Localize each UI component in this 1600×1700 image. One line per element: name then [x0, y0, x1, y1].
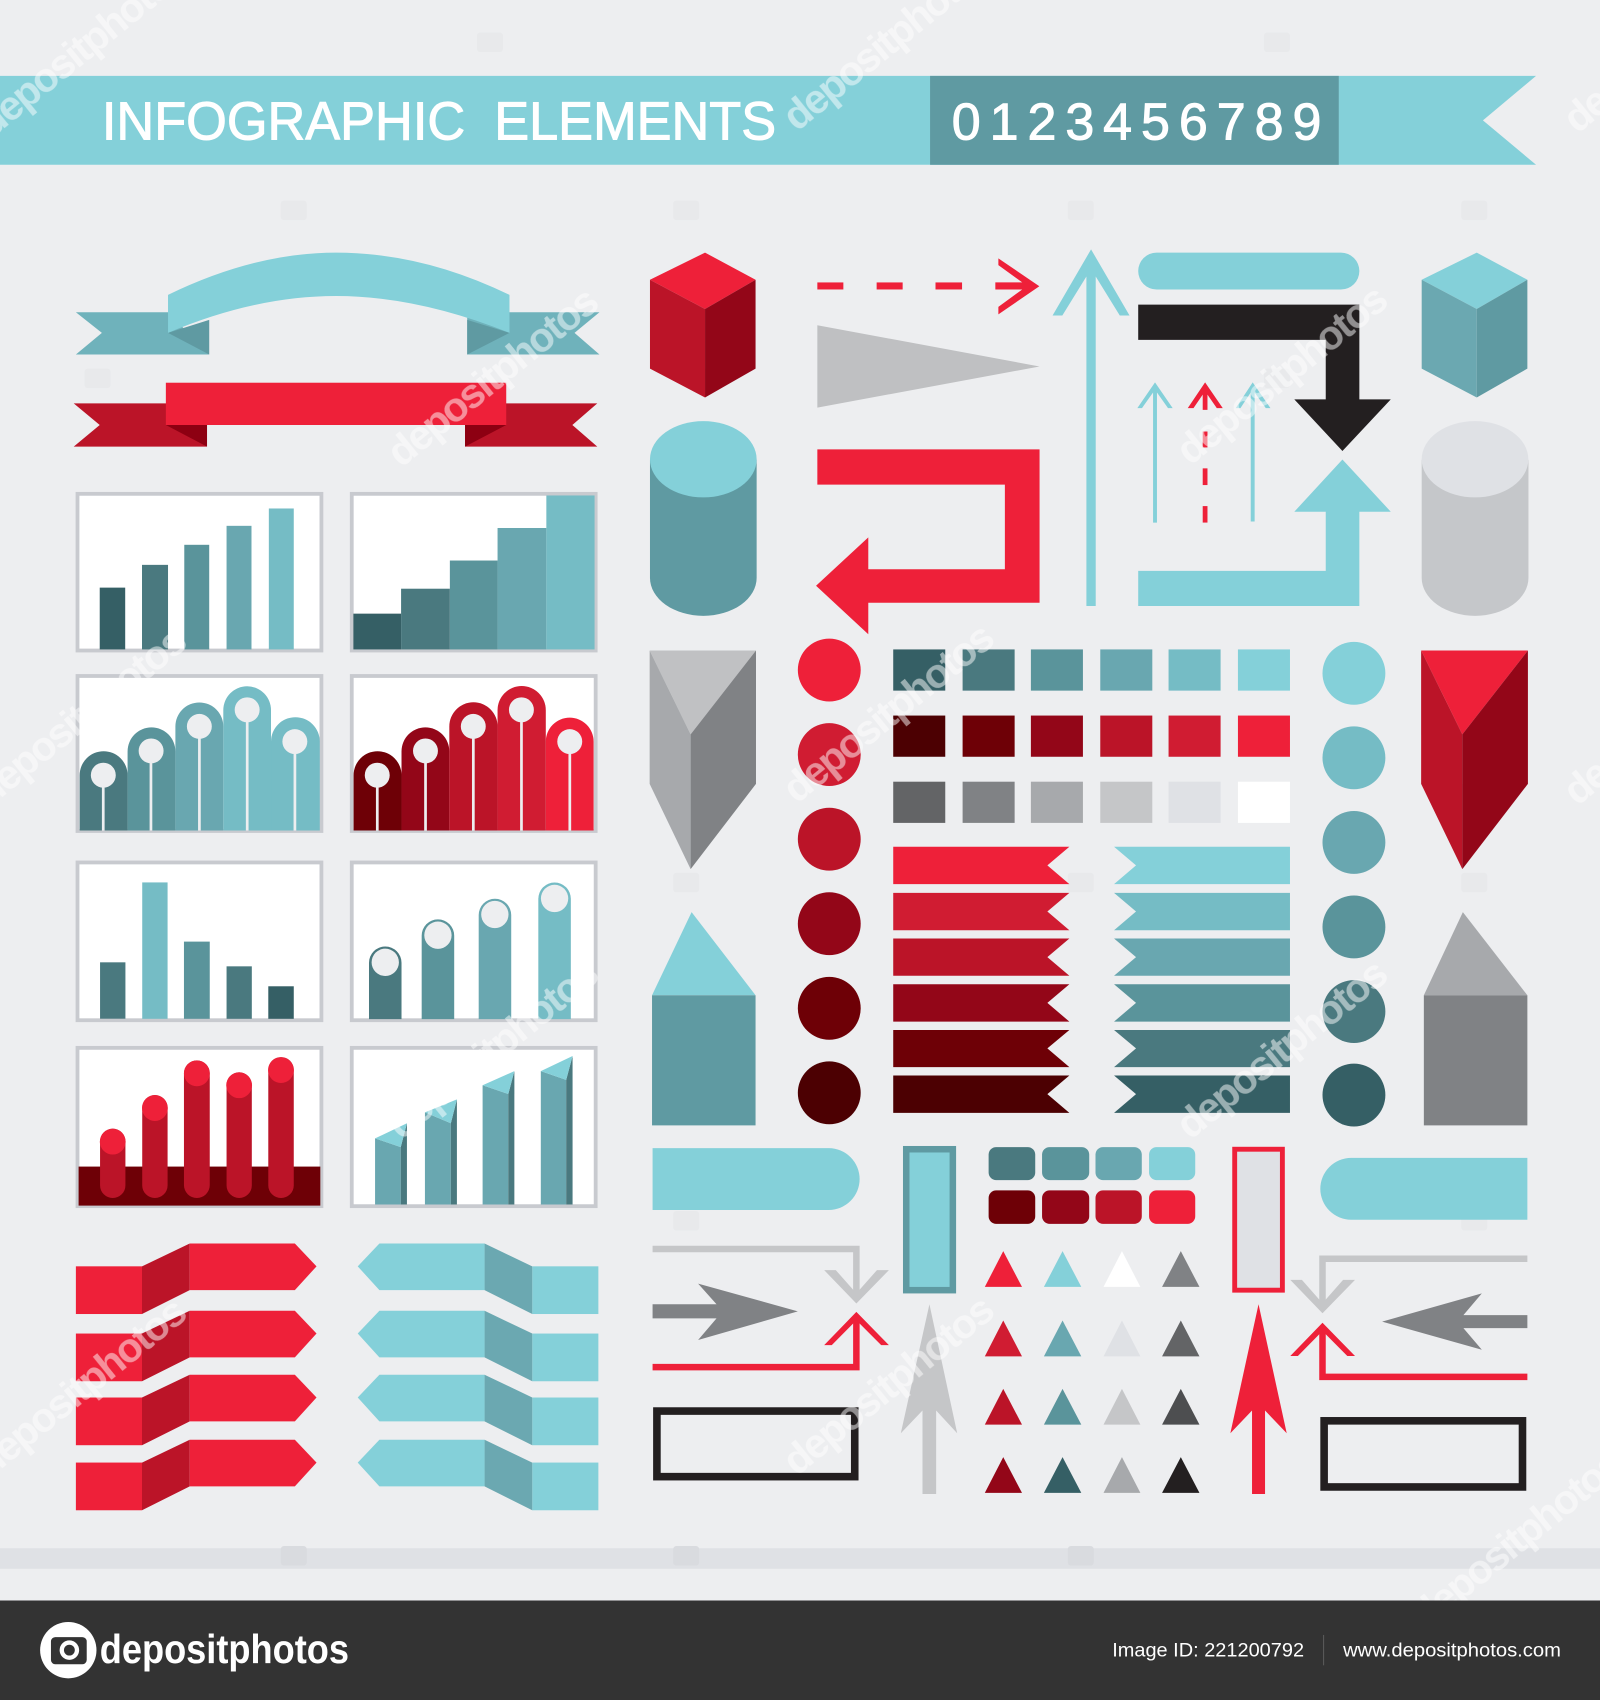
icon: grey wedge — [817, 325, 1040, 408]
icon: red shield prism — [1421, 651, 1528, 869]
arrows: small upward trio — [1137, 382, 1270, 523]
icon: red cube — [650, 253, 756, 397]
icon: grey cylinder — [1422, 421, 1528, 616]
icon: grey shield prism — [650, 651, 756, 869]
icon: teal cylinder — [650, 421, 757, 616]
icon: teal house block — [652, 912, 756, 1125]
chart: teal prisms — [352, 1048, 596, 1206]
arrow: red connector right — [1290, 1323, 1527, 1380]
ribbon: teal arched — [76, 253, 599, 355]
site url: www.depositphotos.com — [1342, 1640, 1561, 1662]
teal tab right — [1320, 1158, 1527, 1220]
arrow: red up — [1230, 1304, 1287, 1494]
heading: infographic elements: INFOGRAPHIC ELEMENTS — [102, 91, 776, 151]
teal circle column — [1322, 642, 1385, 1126]
chart: mixed teal bars — [78, 862, 321, 1020]
arrow: red U-turn — [816, 449, 1040, 634]
colour swatches — [893, 649, 1290, 823]
chart: teal pill bars with circles — [352, 862, 596, 1020]
teal folded arrow ribbons — [358, 1244, 598, 1510]
text: depositphotos — [1167, 275, 1396, 473]
red notched flags — [893, 847, 1069, 1113]
chart: teal arches with pins — [78, 676, 321, 831]
logo: wordmark: depositphotos — [100, 1626, 349, 1672]
rounded colour chips — [989, 1147, 1195, 1224]
numerals: 0123456789 — [952, 93, 1321, 151]
chart: red arches with pins — [352, 676, 596, 831]
title banner — [0, 76, 1536, 165]
red outlined box — [1235, 1149, 1282, 1290]
chart: rising teal bars — [78, 494, 321, 651]
chart: red cylinders — [78, 1048, 321, 1206]
icon: grey house block — [1424, 912, 1527, 1125]
image id: Image ID: 221200792 — [1112, 1640, 1304, 1662]
logo: camera badge — [40, 1622, 96, 1678]
text: depositphotos — [1167, 949, 1396, 1148]
ribbon: red straight — [74, 383, 597, 447]
arrow: grey pointer left — [1382, 1293, 1527, 1350]
text: depositphotos — [773, 613, 1003, 811]
arrow: grey pointer right — [653, 1284, 798, 1340]
icon: teal cube — [1422, 253, 1527, 397]
red circle column — [798, 639, 861, 1124]
arrow: red dashed — [817, 258, 1039, 314]
chart: teal staircase — [352, 494, 596, 651]
arrow: grey connector left — [653, 1246, 889, 1304]
arrow: grey up — [901, 1304, 957, 1494]
text: depositphotos — [378, 949, 607, 1148]
footer bar — [0, 1600, 1600, 1700]
red folded arrow ribbons — [76, 1244, 317, 1510]
arrow: grey connector right — [1290, 1255, 1527, 1313]
arrow: black elbow — [1138, 305, 1391, 451]
teal notched flags — [1114, 847, 1290, 1113]
teal pill — [1138, 253, 1359, 289]
teal outlined box — [906, 1149, 953, 1290]
arrow: teal elbow up — [1138, 459, 1391, 606]
text: depositphotos — [378, 277, 607, 475]
text: depositphotos — [773, 1286, 1003, 1484]
triangle grid — [985, 1251, 1199, 1493]
black outlined box right — [1324, 1421, 1522, 1487]
black outlined box left — [657, 1411, 855, 1477]
arrow: red connector left — [653, 1312, 889, 1370]
arrow: tall teal — [1053, 249, 1130, 606]
teal tab left — [653, 1148, 860, 1210]
